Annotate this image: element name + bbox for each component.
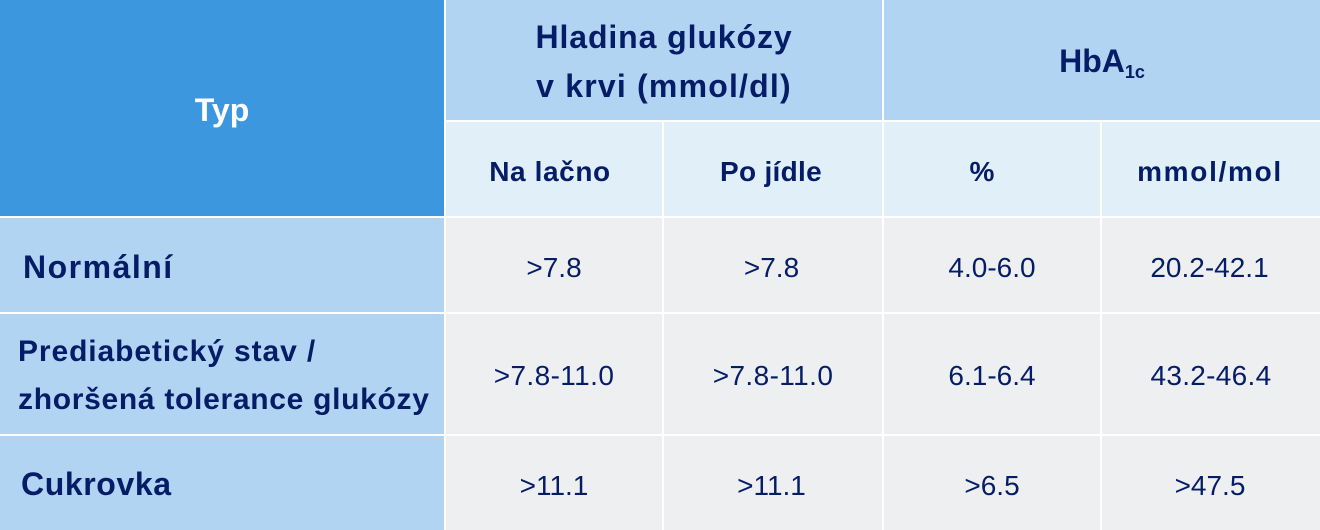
value: prediabetes percent: 6.1-6.4 bbox=[948, 360, 1036, 391]
value: normal percent: 4.0-6.0 bbox=[948, 252, 1036, 282]
value: diabetes percent: >6.5 bbox=[964, 470, 1020, 500]
header: HbA1c bbox=[884, 0, 1320, 120]
subheader: Na lačno bbox=[446, 122, 662, 216]
value: prediabetes after meal: >7.8-11.0 bbox=[713, 360, 833, 391]
value: normal after meal bbox=[664, 218, 882, 312]
value: diabetes after meal: >11.1 bbox=[737, 470, 806, 500]
value: prediabetes mmol/mol: 43.2-46.4 bbox=[1150, 360, 1272, 391]
value: prediabetes fasting: >7.8-11.0 bbox=[494, 360, 614, 391]
header: Typ bbox=[0, 0, 444, 216]
subheader: %: % bbox=[970, 156, 994, 187]
value: normal fasting: >7.8 bbox=[526, 252, 582, 282]
value: diabetes fasting bbox=[446, 436, 662, 530]
subheader: Na lačno: Na lačno bbox=[489, 156, 611, 187]
subheader: Po jídle bbox=[664, 122, 882, 216]
row label: Prediabetický stav: Prediabetický stav / bbox=[18, 334, 316, 368]
value: normal percent bbox=[884, 218, 1100, 312]
subheader: mmol/mol bbox=[1102, 122, 1320, 216]
header: Typ: Typ bbox=[195, 92, 249, 128]
value: normal after meal: >7.8 bbox=[744, 252, 799, 282]
header: Hladina glukózy v krvi bbox=[446, 0, 882, 120]
row label: Cukrovka: Cukrovka bbox=[21, 466, 172, 502]
value: prediabetes mmol/mol bbox=[1102, 314, 1320, 434]
value: diabetes fasting: >11.1 bbox=[520, 470, 588, 500]
value: normal fasting bbox=[446, 218, 662, 312]
subheader: Po jídle: Po jídle bbox=[720, 156, 822, 187]
header: Hladina glukózy v krvi: Hladina glukózy bbox=[535, 18, 793, 54]
row label: Prediabetický stav: zhoršená tolerance glukózy bbox=[18, 382, 430, 416]
value: normal mmol/mol bbox=[1102, 218, 1320, 312]
value: prediabetes percent bbox=[884, 314, 1100, 434]
value: diabetes percent bbox=[884, 436, 1100, 530]
value: prediabetes after meal bbox=[664, 314, 882, 434]
value: diabetes after meal bbox=[664, 436, 882, 530]
subheader: % bbox=[884, 122, 1100, 216]
value: prediabetes fasting bbox=[446, 314, 662, 434]
row label: Cukrovka bbox=[0, 436, 444, 530]
header: HbA1c: HbA1c bbox=[1059, 43, 1145, 82]
value: normal mmol/mol: 20.2-42.1 bbox=[1150, 252, 1269, 282]
subheader: mmol/mol: mmol/mol bbox=[1137, 156, 1283, 187]
value: diabetes mmol/mol: >47.5 bbox=[1175, 470, 1245, 500]
header: Hladina glukózy v krvi: v krvi (mmol/dl) bbox=[536, 68, 792, 104]
row label: Prediabetický stav bbox=[0, 314, 444, 434]
value: diabetes mmol/mol bbox=[1102, 436, 1320, 530]
row label: Normální: Normální bbox=[23, 249, 174, 285]
row label: Normální bbox=[0, 218, 444, 312]
